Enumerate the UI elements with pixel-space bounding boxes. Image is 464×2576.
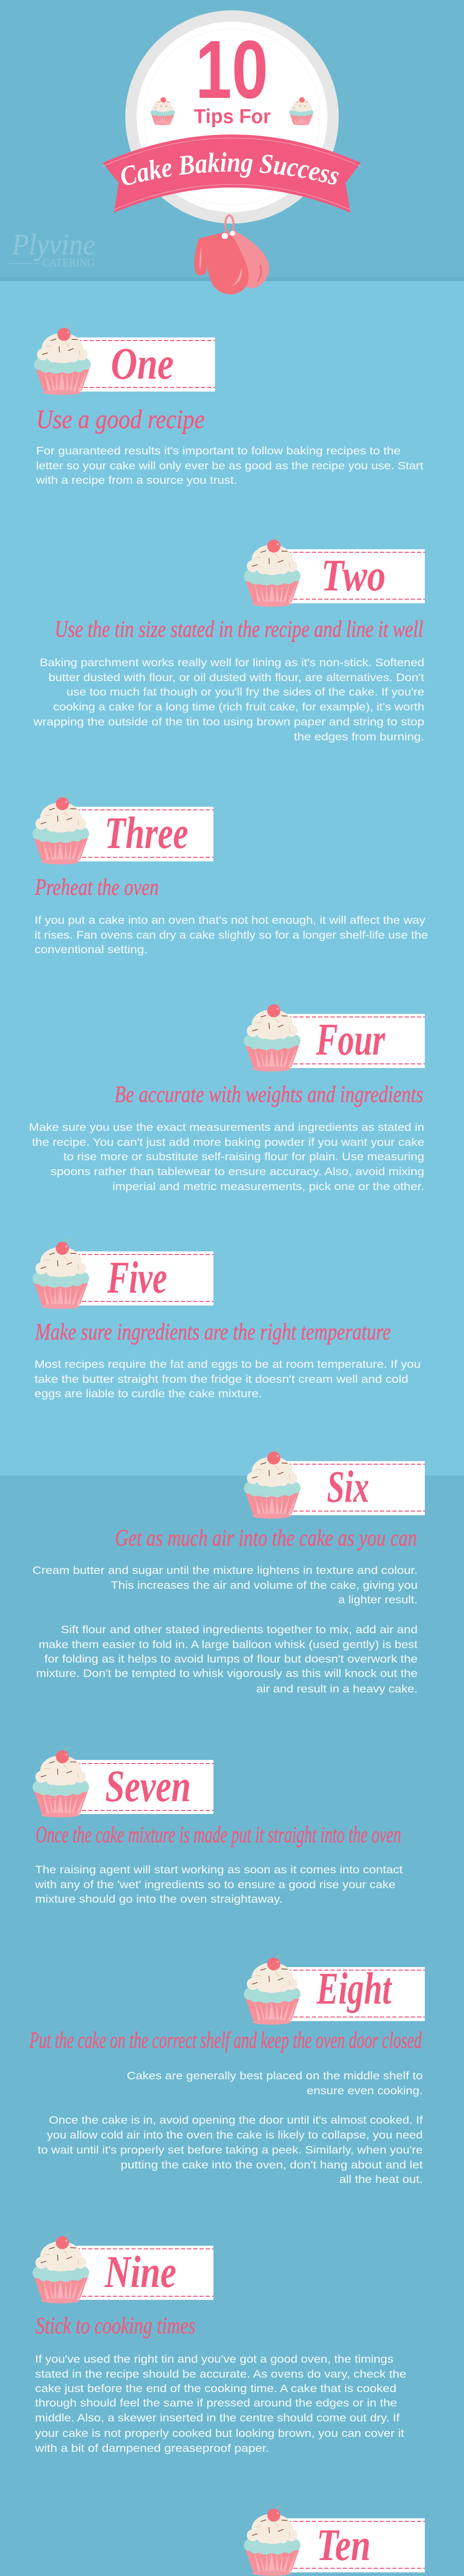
- body text: to rise more or substitute self-raising flour for plain. Use measuring: [63, 1151, 424, 1163]
- body text: putting the cake into the oven, don't hang about and let: [121, 2159, 423, 2171]
- number banner: [287, 1967, 425, 2021]
- ribbon banner: Cake Baking Success: [121, 152, 339, 185]
- number banner: [76, 1760, 213, 1814]
- body text: take the butter straight from the fridge it doesn't cream well and cold: [35, 1374, 408, 1385]
- number: Ten: [317, 2520, 371, 2570]
- icon: small cupcake right: [289, 96, 313, 125]
- body text: Cream butter and sugar until the mixture lightens in texture and colour.: [32, 1565, 418, 1577]
- panel: tip three: [32, 794, 428, 956]
- body text: eggs are liable to curdle the cake mixture.: [35, 1388, 262, 1400]
- panel: tip five: [32, 1239, 421, 1400]
- logo watermark: Plyvine: [11, 228, 95, 261]
- number banner: [76, 1251, 213, 1306]
- icon: cupcake: [244, 2506, 301, 2576]
- body text: cooking a cake for a long time (rich fruit cake, for example), it's worth: [53, 701, 424, 713]
- icon: cupcake: [244, 1002, 301, 1072]
- title number: 10: [195, 23, 268, 115]
- body text: Baking parchment works really well for lining as it's non-stick. Softened: [40, 657, 424, 669]
- number: Six: [327, 1462, 369, 1512]
- number banner: [287, 1014, 425, 1068]
- body text: ensure even cooking.: [307, 2085, 423, 2097]
- number: Four: [316, 1015, 386, 1065]
- panel: tip eight: [29, 1955, 425, 2185]
- body text: Once the cake is in, avoid opening the door until it's almost cooked. If: [49, 2114, 423, 2126]
- icon: small cupcake left: [151, 96, 175, 125]
- heading: Use a good recipe: [36, 405, 205, 434]
- background: darker section: [0, 1476, 464, 2576]
- body text: mixture should go into the oven straightaway.: [35, 1893, 283, 1905]
- icon: cupcake: [244, 1955, 301, 2025]
- body text: imperial and metric measurements, pick one or the other.: [112, 1181, 424, 1193]
- body text: middle. Also, a skewer inserted in the centre should come out dry. If: [35, 2412, 400, 2424]
- logo watermark: CATERING: [42, 256, 95, 269]
- body text: [32, 1565, 418, 1695]
- number: Two: [321, 551, 386, 601]
- number: One: [111, 339, 174, 389]
- icon: oven mitts: [194, 215, 269, 294]
- icon: cupcake: [32, 2233, 89, 2303]
- body text: If you put a cake into an oven that's not hot enough, it will affect the way: [35, 914, 426, 926]
- body text: letter so your cake will only ever be as good as the recipe you use. Start: [36, 460, 423, 472]
- number banner: [77, 337, 215, 392]
- number banner: [287, 549, 425, 603]
- icon: cupcake: [244, 537, 301, 607]
- body text: stated in the recipe should be accurate. As ovens do vary, check the: [35, 2368, 406, 2380]
- heading: Stick to cooking times: [36, 2312, 195, 2338]
- number: Three: [105, 808, 188, 858]
- icon: cupcake: [32, 1748, 89, 1818]
- body text: Make sure you use the exact measurements and ingredients as stated in: [29, 1122, 424, 1133]
- body text: for folding as it helps to avoid lumps of flour but doesn't overwork the: [44, 1653, 418, 1665]
- body text: a lighter result.: [338, 1594, 418, 1606]
- body text: mixture. Don't be tempted to whisk vigorously as this will knock out the: [36, 1668, 418, 1680]
- panel: tip six: [32, 1449, 425, 1695]
- body text: you allow cold air into the oven the cake is likely to collapse, you need: [47, 2129, 423, 2141]
- body text: [36, 445, 423, 486]
- number banner: [76, 807, 213, 861]
- number banner: [287, 2518, 425, 2572]
- icon: cupcake: [32, 1239, 89, 1309]
- number: Five: [107, 1253, 167, 1303]
- header badge: [102, 10, 361, 295]
- icon: cupcake: [244, 1449, 301, 1519]
- body text: [35, 1359, 421, 1400]
- number: Nine: [104, 2247, 176, 2297]
- body text: the recipe. You can't just add more baking powder if you want your cake: [32, 1137, 424, 1148]
- body text: Sift flour and other stated ingredients together to mix, add air and: [61, 1624, 418, 1636]
- body text: Cakes are generally best placed on the middle shelf to: [127, 2070, 423, 2082]
- body text: with any of the 'wet' ingredients so to ensure a good rise your cake: [35, 1879, 395, 1891]
- body text: [38, 2070, 423, 2185]
- panel: tip two: [33, 537, 425, 743]
- number: Eight: [316, 1964, 392, 2014]
- body text: conventional setting.: [35, 944, 147, 956]
- body text: Most recipes require the fat and eggs to be at room temperature. If you: [35, 1359, 421, 1370]
- body text: [35, 1864, 403, 1905]
- panel: tip one: [34, 325, 423, 486]
- body text: wrapping the outside of the tin too using brown paper and string to stop: [33, 716, 424, 728]
- background: light section: [0, 277, 464, 1476]
- body text: air and result in a heavy cake.: [256, 1683, 418, 1695]
- body text: all the heat out.: [339, 2174, 423, 2185]
- body text: through should feel the same if pressed around the edges or in the: [35, 2397, 397, 2409]
- body text: The raising agent will start working as soon as it comes into contact: [35, 1864, 403, 1876]
- number banner: [76, 2246, 213, 2300]
- body text: [35, 2353, 406, 2454]
- body text: use too much fat though or you'll fry the sides of the cake. If you're: [67, 686, 424, 698]
- title: tips for: Tips For: [194, 106, 271, 128]
- icon: cupcake: [32, 794, 89, 865]
- body text: This increases the air and volume of the cake, giving you: [111, 1580, 418, 1591]
- body text: spoons rather than tablewear to ensure accuracy. Also, avoid mixing: [51, 1166, 424, 1178]
- body text: If you've used the right tin and you've got a good oven, the timings: [35, 2353, 393, 2365]
- body text: the edges from burning.: [294, 731, 424, 743]
- heading: Preheat the oven: [35, 874, 159, 900]
- body text: [35, 914, 428, 956]
- body text: with a recipe from a source you trust.: [36, 474, 237, 486]
- plate circle: [125, 10, 339, 224]
- body text: For guaranteed results it's important to follow baking recipes to the: [36, 445, 401, 457]
- icon: cupcake: [34, 325, 91, 395]
- body text: butter dusted with flour, or oil dusted with flour, are alternatives. Don't: [48, 672, 424, 684]
- body text: [33, 657, 424, 743]
- number banner: [287, 1461, 425, 1515]
- body text: to wait until it's properly set before taking a peek. Similarly, when you're: [38, 2144, 423, 2156]
- panel: tip seven: [32, 1748, 403, 1905]
- number: Seven: [105, 1761, 191, 1811]
- body text: make them easier to fold in. A large balloon whisk (used gently) is best: [39, 1639, 418, 1651]
- background: shelf edge: [0, 277, 464, 281]
- body text: [29, 1122, 424, 1193]
- panel: tip four: [29, 1002, 425, 1193]
- ribbon banner: [102, 134, 361, 213]
- panel: tip nine: [32, 2233, 406, 2454]
- panel: tip ten: [48, 2506, 425, 2576]
- background: top band: [0, 0, 464, 281]
- body text: cake just before the end of the cooking time. A cake that is cooked: [35, 2383, 396, 2395]
- body text: with a bit of dampened greaseproof paper.: [35, 2443, 269, 2454]
- body text: your cake is not properly cooked but looking brown, you can cover it: [35, 2428, 404, 2439]
- body text: it rises. Fan ovens can dry a cake slightly so for a longer shelf-life use the: [35, 929, 428, 941]
